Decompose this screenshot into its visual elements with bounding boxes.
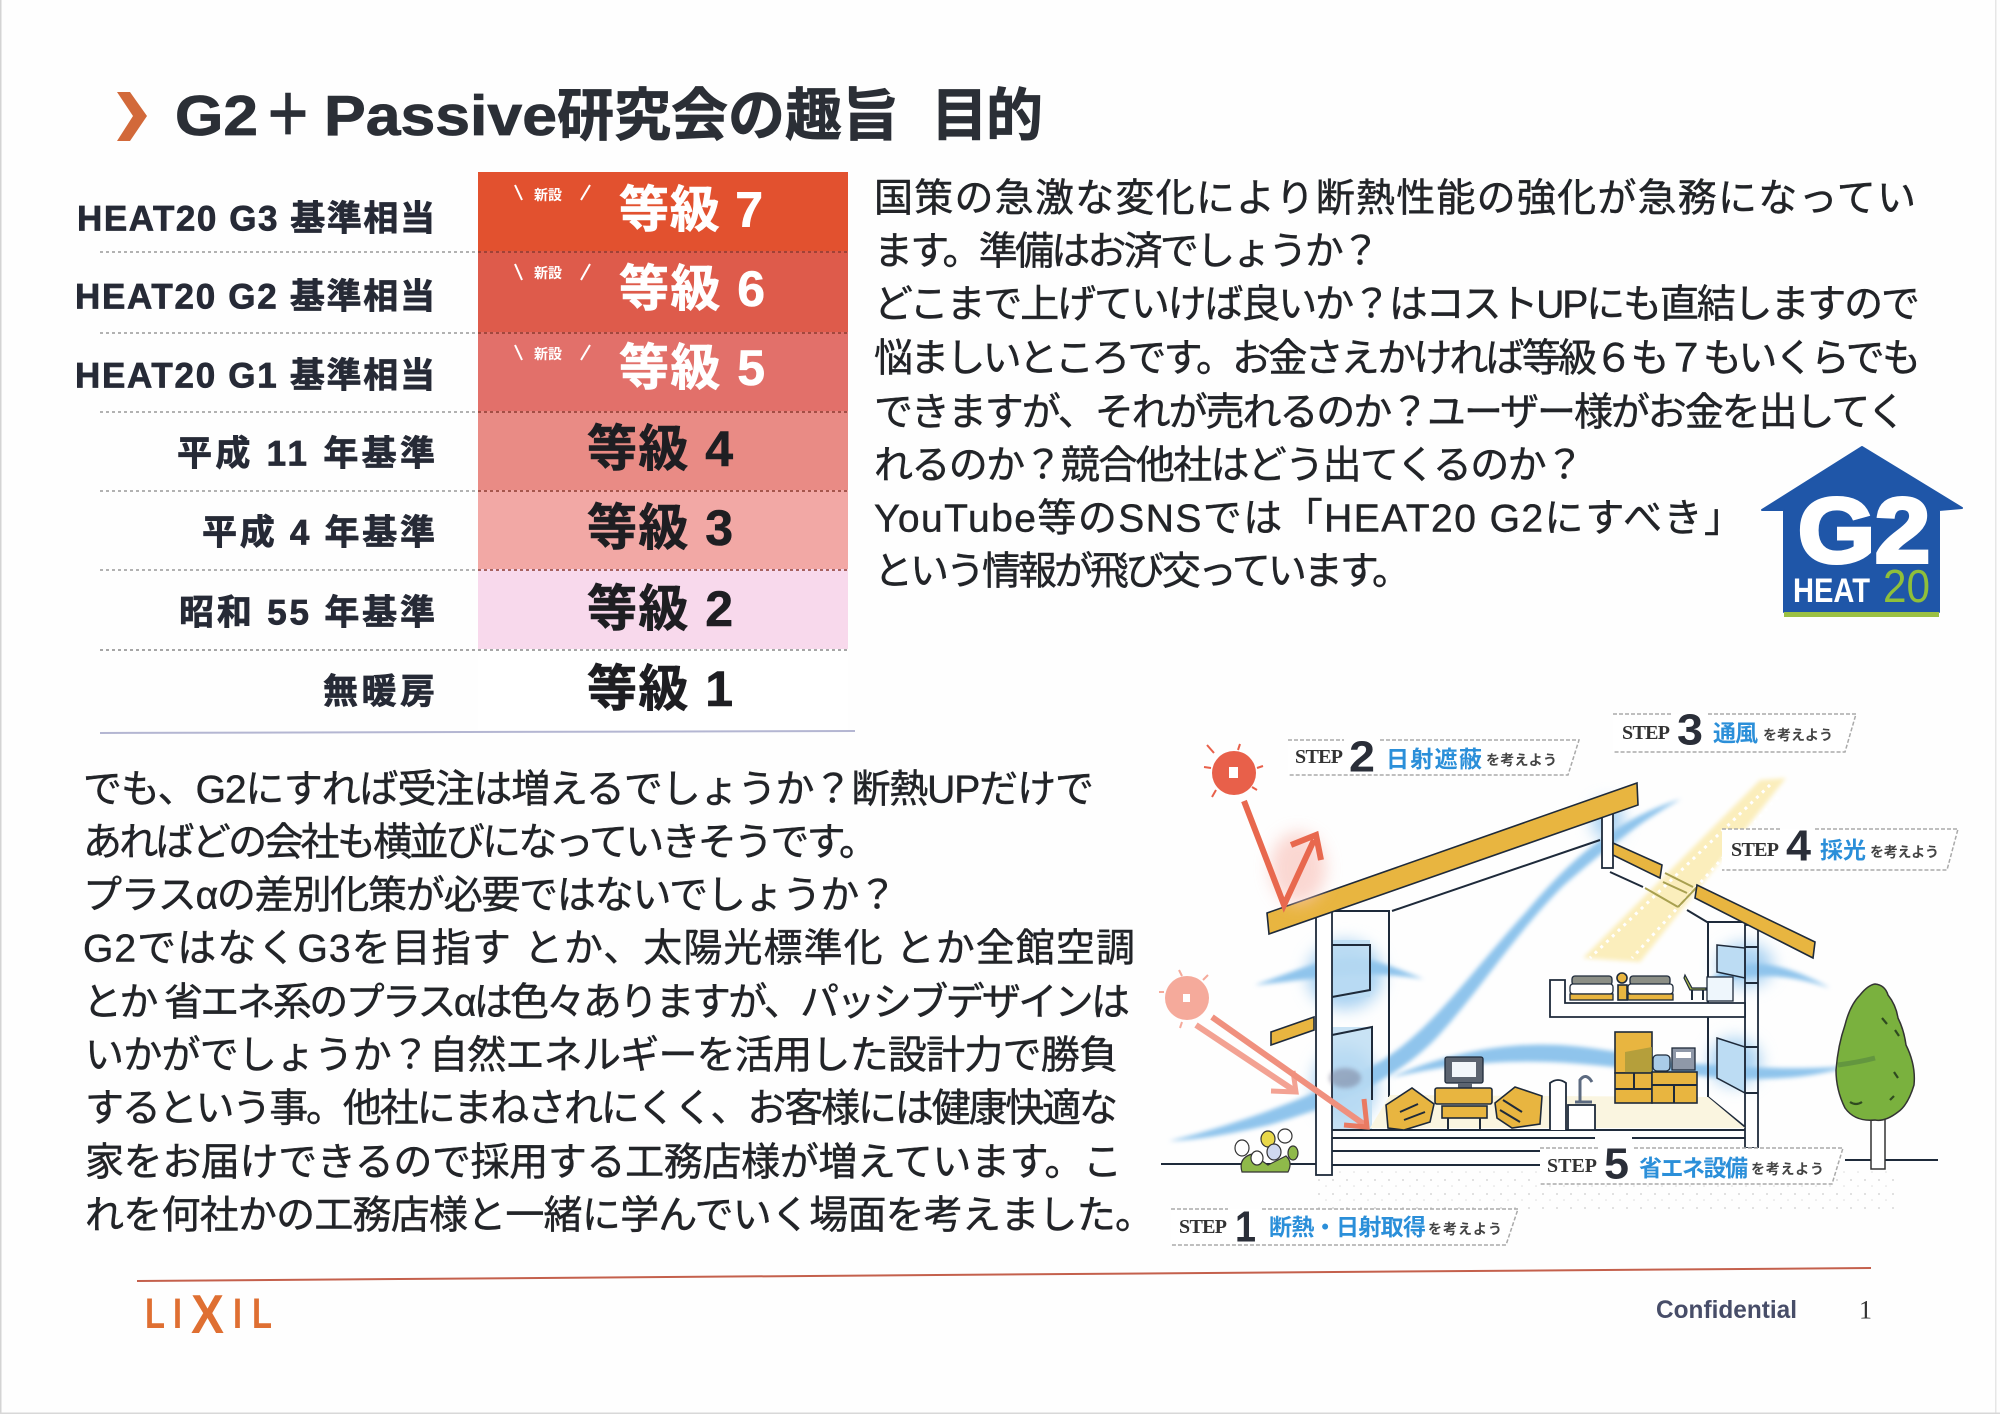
- title: [117, 84, 1043, 148]
- logo: LIXIL: X: [191, 1283, 224, 1345]
- callout: step 4: 採光: [1820, 837, 1866, 863]
- callout: step 3: 3: [1677, 706, 1703, 754]
- logo: LIXIL: I: [233, 1290, 242, 1338]
- grade labels: 等級 5: [619, 340, 765, 396]
- logo: LIXIL: I: [173, 1290, 182, 1338]
- title text: ＋: [264, 84, 312, 148]
- callout: step 3: [1613, 706, 1856, 754]
- wind flows: [1169, 799, 1850, 1141]
- kitchen: [1550, 1032, 1697, 1130]
- grade labels: 等級 4: [587, 421, 733, 477]
- living room furniture: [1386, 1057, 1542, 1130]
- text block: lower paragraph: するという事。他社にまねされにくく、お客様には健康快適な: [85, 1088, 1118, 1130]
- callout: step 1: [1171, 1202, 1518, 1252]
- callout: step 2: 日射遮蔽: [1386, 746, 1482, 772]
- row labels: HEAT20 G2 基準相当: [75, 278, 435, 316]
- callout: step 4: 4: [1786, 822, 1812, 870]
- text block: upper paragraph: できますが、それが売れるのか？ユーザー様がお金を出してく: [874, 392, 1906, 434]
- chart: passive house illustration: [1159, 744, 1938, 1211]
- icon: HEAT20 G2 house logo: 20: [1883, 560, 1930, 612]
- callout: step 5: 5: [1604, 1140, 1629, 1188]
- grade labels: 等級 2: [587, 581, 733, 637]
- callout: step 4: を考えよう: [1870, 844, 1939, 860]
- confidential note: Confidential: [1656, 1296, 1797, 1324]
- sun: winter: [1159, 970, 1367, 1127]
- icon: HEAT20 G2 house logo: G2: [1798, 480, 1930, 582]
- row labels: [75, 200, 435, 712]
- text block: lower paragraph: でも、G2にすれば受注は増えるでしょうか？断熱UPだけで: [83, 768, 1094, 812]
- title text: [175, 84, 1043, 148]
- new badges: 新設: [534, 346, 562, 362]
- icon: HEAT20 G2 house logo: HEAT: [1793, 572, 1870, 610]
- callout: step 2: [1288, 732, 1579, 782]
- row labels: 平成 4 年基準: [202, 514, 435, 552]
- callout: step 5: 省エネ設備: [1639, 1155, 1748, 1181]
- tree: [1836, 984, 1914, 1169]
- text block: upper paragraph: どこまで上げていけば良いか？はコストUPにも直結しますので: [874, 284, 1920, 326]
- text block: upper paragraph: ます。準備はお済でしょうか？: [874, 230, 1380, 274]
- callout: step 2: STEP: [1295, 746, 1343, 768]
- row labels: 昭和 55 年基準: [179, 594, 435, 632]
- icon: chevron: [117, 92, 147, 141]
- logo: LIXIL: [145, 1283, 272, 1345]
- text block: lower paragraph: あればどの会社も横並びになっていきそうです。: [83, 822, 878, 864]
- text block: lower paragraph: いかがでしょうか？自然エネルギーを活用した設計力で勝負: [85, 1034, 1118, 1078]
- text block: lower paragraph: プラスαの差別化策が必要ではないでしょうか？: [83, 874, 897, 918]
- skylight beam: [1583, 778, 1786, 962]
- title text: G2: [175, 84, 258, 148]
- text block: upper paragraph: れるのか？競合他社はどう出てくるのか？: [874, 444, 1584, 488]
- new badges: 新設: [534, 187, 562, 203]
- callout: step 3: STEP: [1622, 722, 1670, 744]
- callout: step 1: 断熱・日射取得: [1269, 1214, 1426, 1240]
- new badges: [515, 185, 590, 362]
- page number: 1: [1859, 1296, 1872, 1324]
- callout: step 1: を考えよう: [1428, 1221, 1502, 1237]
- windows: [1317, 940, 1745, 1130]
- ground stipple: [1316, 1171, 1896, 1211]
- row labels: HEAT20 G3 基準相当: [77, 200, 435, 238]
- text block: lower paragraph: れを何社かの工務店様と一緒に学んでいく場面を考えました。: [85, 1194, 1154, 1238]
- flowers: [1235, 1129, 1298, 1172]
- callout: step 4: STEP: [1731, 839, 1779, 861]
- row labels: HEAT20 G1 基準相当: [75, 356, 435, 396]
- callout: step 2: 2: [1349, 732, 1375, 782]
- title text: 研究会の趣旨: [557, 84, 899, 148]
- callout: step 5: を考えよう: [1751, 1161, 1824, 1177]
- grade labels: 等級 1: [587, 661, 733, 717]
- callout: step 3: を考えよう: [1763, 727, 1833, 743]
- text block: upper paragraph: YouTube等のSNSでは「HEAT20 G2にすべき」: [874, 498, 1743, 540]
- text block: upper paragraph: という情報が飛び交っています。: [874, 550, 1411, 594]
- row labels: 無暖房: [323, 672, 435, 712]
- text block: upper paragraph: [874, 178, 1921, 594]
- callout: step 4: [1722, 822, 1958, 870]
- callout: step 1: 1: [1235, 1202, 1256, 1252]
- text block: upper paragraph: 悩ましいところです。お金さえかければ等級６も７もいくらでも: [874, 338, 1921, 380]
- logo: LIXIL: L: [252, 1290, 272, 1338]
- callout: step 5: STEP: [1547, 1155, 1597, 1177]
- roof: [1267, 783, 1815, 1045]
- new badges: 新設: [534, 265, 562, 281]
- title text: Passive: [324, 84, 557, 148]
- grade labels: 等級 6: [619, 261, 765, 317]
- grade labels: [587, 182, 765, 717]
- callout: step 5: [1540, 1140, 1843, 1188]
- grade labels: 等級 7: [619, 182, 763, 238]
- panel: energy grade table: [75, 172, 855, 733]
- title text: 目的: [931, 84, 1043, 148]
- grade labels: 等級 3: [587, 500, 733, 556]
- logo: LIXIL: L: [145, 1290, 165, 1338]
- ground line: [1161, 1160, 1938, 1164]
- row labels: 平成 11 年基準: [177, 434, 435, 474]
- house structure: [1316, 812, 1758, 1175]
- footer: [137, 1268, 1872, 1345]
- upper floor furniture: [1570, 973, 1733, 1001]
- callout: step 2: を考えよう: [1486, 752, 1557, 768]
- text block: upper paragraph: 国策の急激な変化により断熱性能の強化が急務になってい: [874, 178, 1916, 220]
- callout: step 3: 通風: [1713, 720, 1758, 746]
- icon: HEAT20 G2 house logo: [1762, 447, 1962, 617]
- text block: lower paragraph: 家をお届けできるので採用する工務店様が増えています。こ: [85, 1142, 1122, 1184]
- callout: step 1: STEP: [1179, 1216, 1227, 1238]
- text block: lower paragraph: とか 省エネ系のプラスαは色々ありますが、パッシブデザインは: [83, 982, 1130, 1024]
- sun: reflected: [1204, 744, 1326, 905]
- text block: lower paragraph: [83, 768, 1154, 1238]
- grade bands: [478, 172, 848, 730]
- text block: lower paragraph: G2ではなくG3を目指す とか、太陽光標準化 とか全館空調: [83, 928, 1135, 970]
- blue wash around walls: [1307, 800, 1773, 1123]
